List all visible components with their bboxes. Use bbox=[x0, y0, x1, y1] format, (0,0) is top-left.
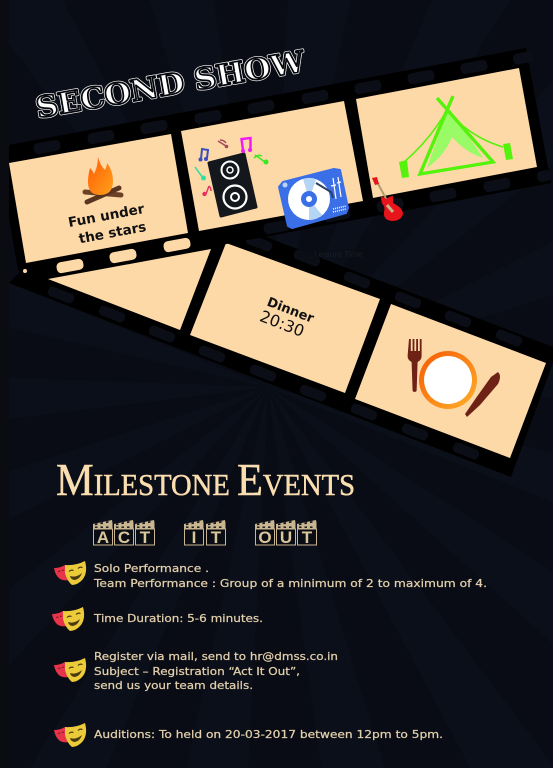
frame: dinner time bbox=[190, 243, 380, 393]
film perforations: light holes bbox=[23, 237, 191, 274]
film perforations: lower strip bbox=[47, 233, 523, 461]
text: performance types bbox=[93, 562, 487, 590]
text: registration details: Register via mail, send to hr@dmss.co.in bbox=[94, 650, 338, 663]
icon: turntable bbox=[279, 169, 348, 228]
frame: fun under the stars bbox=[9, 134, 188, 263]
text: fun under the stars bbox=[67, 201, 149, 249]
heading: act it out clapper tiles bbox=[93, 520, 316, 547]
icon: campfire bbox=[85, 157, 121, 202]
heading: act it out clapper tiles: O bbox=[258, 528, 272, 547]
text: time duration: Time Duration: 5-6 minutes. bbox=[93, 612, 263, 625]
heading: act it out clapper tiles: T bbox=[211, 528, 222, 547]
icon: theatre masks 4 bbox=[54, 723, 86, 747]
title: second show: SECOND SHOW bbox=[33, 44, 308, 125]
frame: tent bbox=[356, 68, 537, 198]
heading: act it out clapper tiles: C bbox=[118, 528, 130, 547]
text: registration details bbox=[94, 650, 338, 692]
text: registration details: send us your team details. bbox=[94, 679, 253, 692]
text: dinner 20:30 bbox=[257, 294, 316, 343]
frame: music bbox=[181, 101, 363, 231]
icon: plate with fork and knife bbox=[408, 339, 500, 417]
heading: act it out clapper tiles: T bbox=[302, 528, 313, 547]
film perforations: upper strip top bbox=[33, 51, 552, 235]
heading: act it out clapper tiles: A bbox=[97, 528, 109, 547]
frame: blank triangle bbox=[48, 249, 211, 330]
text: audition date: Auditions: To held on 20-03-2017 between 12pm to 5pm. bbox=[94, 728, 443, 741]
text: dinner 20:30: Dinner bbox=[265, 295, 316, 327]
text: performance types: Team Performance : Group of a minimum of 2 to maximum of 4. bbox=[93, 577, 487, 590]
heading: act it out clapper tiles: U bbox=[280, 528, 292, 547]
faint caption: leisure time: Leisure Time bbox=[314, 249, 363, 259]
heading: act it out clapper tiles: I bbox=[192, 528, 196, 547]
icon: theatre masks 1 bbox=[54, 561, 86, 585]
icon: tent bbox=[399, 96, 513, 178]
icons: music notes bbox=[195, 138, 268, 196]
title: second show: SECOND SHOW bbox=[33, 44, 308, 125]
text: registration details: Subject – Registration “Act It Out”, bbox=[94, 665, 300, 678]
panel: upper film strip bbox=[9, 48, 552, 281]
text: performance types: Solo Performance . bbox=[94, 562, 209, 575]
left margin band bbox=[0, 0, 9, 768]
icon: speaker bbox=[209, 154, 256, 216]
text: dinner 20:30: 20:30 bbox=[257, 307, 307, 341]
text: fun under the stars: the stars bbox=[78, 219, 148, 247]
heading: milestone events: MILESTONE EVENTS bbox=[56, 454, 355, 505]
icon: theatre masks 3 bbox=[54, 658, 86, 682]
panel: lower film strip bbox=[9, 227, 553, 477]
text: fun under the stars: Fun under bbox=[67, 201, 146, 231]
frame: plate and cutlery bbox=[355, 304, 546, 458]
icon: theatre masks 2 bbox=[52, 607, 84, 631]
heading: act it out clapper tiles: T bbox=[140, 528, 151, 547]
icon: guitar bbox=[372, 177, 403, 221]
